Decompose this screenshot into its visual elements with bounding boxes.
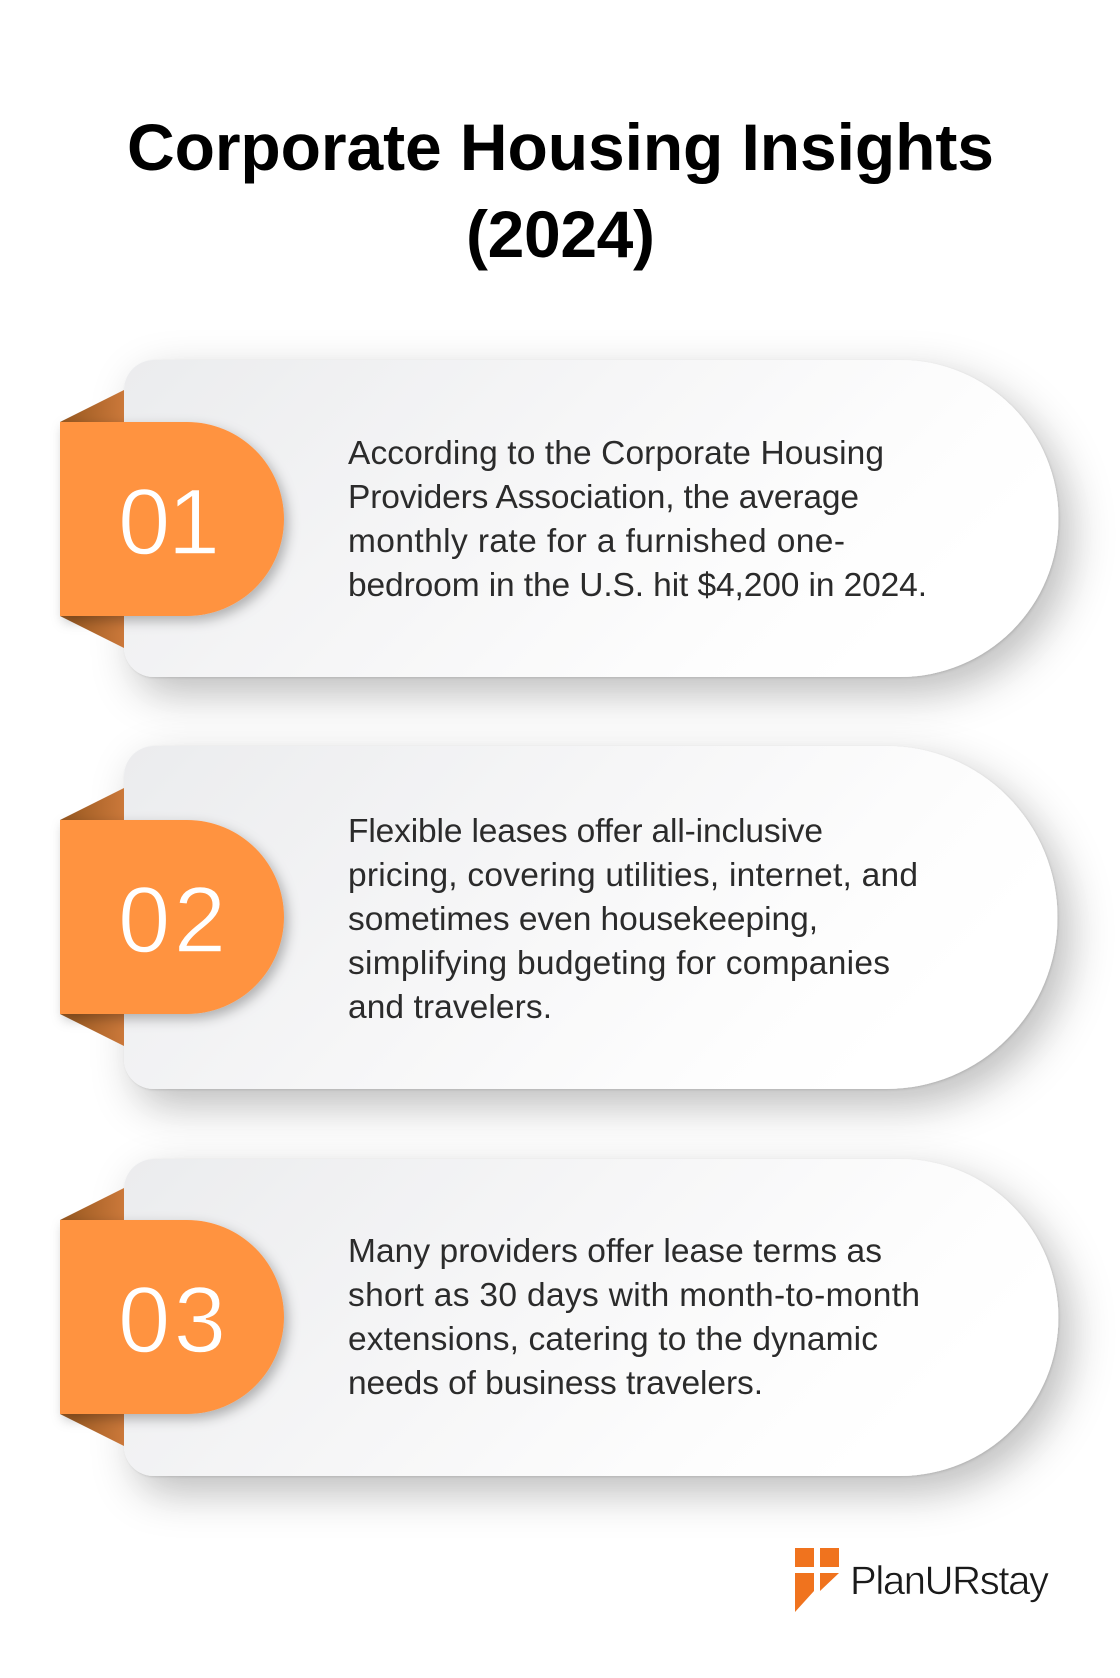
text block 03: Many providers offer lease terms as [348,1233,882,1270]
panel: insight 01 [60,360,1058,677]
ribbon fold top 03 [60,1188,124,1220]
ribbon fold bottom 01 [60,616,124,648]
text block 03: extensions, catering to the dynamic [348,1321,878,1358]
card background 03 [124,1159,1058,1476]
title: (2024) [466,197,655,271]
text block 03: needs of business travelers. [348,1365,763,1402]
logo: PlanURstay [795,1548,1049,1612]
text block 03: short as 30 days with month-to-month [348,1277,920,1314]
text block 03 [348,1233,920,1402]
text block 01: Providers Association, the average [348,479,859,516]
card background 02 [124,746,1058,1089]
number 03: 03 [118,1267,226,1372]
text block 01: monthly rate for a furnished one- [348,523,845,560]
ribbon fold bottom 03 [60,1414,124,1446]
text block 02: pricing, covering utilities, internet, and [348,857,918,894]
title [127,110,994,271]
text block 02 [348,813,918,1026]
number badge 01 [60,422,284,616]
panel: insight 03 [60,1159,1058,1476]
number badge 02 [60,820,284,1014]
number 02: 02 [118,867,226,972]
text block 01: According to the Corporate Housing [348,435,884,472]
text block 02: sometimes even housekeeping, [348,901,818,938]
text block 01: bedroom in the U.S. hit $4,200 in 2024. [348,567,927,604]
title: Corporate Housing Insights [127,110,994,184]
number 01: 01 [118,469,220,574]
text block 01 [348,435,927,604]
number badge 03 [60,1220,284,1414]
logo wordmark: PlanURstay [850,1559,1049,1603]
ribbon fold bottom 02 [60,1014,124,1046]
icon: logo mark [795,1548,839,1612]
panel: insight 02 [60,746,1058,1089]
ribbon fold top 01 [60,390,124,422]
ribbon fold top 02 [60,788,124,820]
text block 02: Flexible leases offer all-inclusive [348,813,823,850]
text block 02: and travelers. [348,989,552,1026]
card background 01 [124,360,1058,677]
text block 02: simplifying budgeting for companies [348,945,890,982]
